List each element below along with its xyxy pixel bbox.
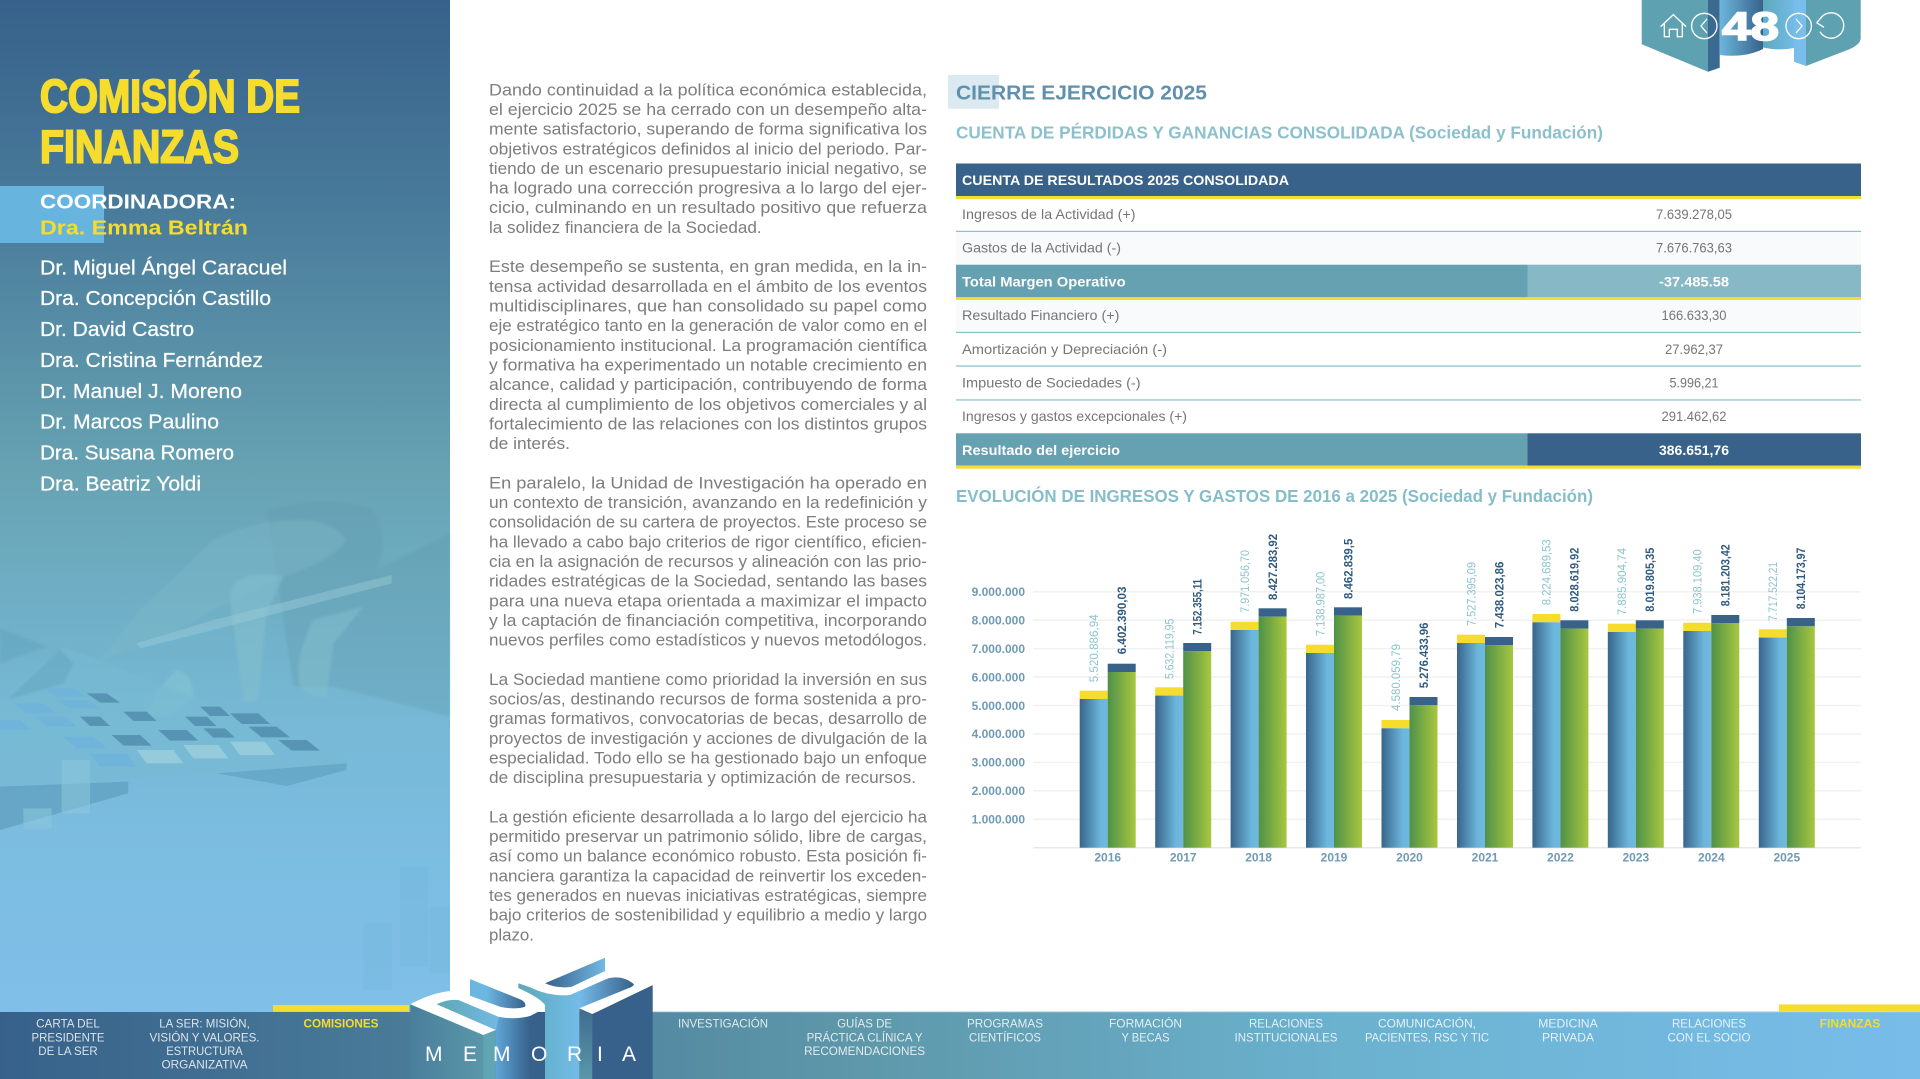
- bars 2024: 8.181.203,42: [1719, 544, 1733, 606]
- title: COMISIÓN DE: [40, 70, 300, 122]
- row: resultado del ejercicio: 386.651,76: [1659, 442, 1729, 458]
- row: impuesto: Impuesto de Sociedades (-): [962, 374, 1141, 390]
- paragraph 5: bajo criterios de sostenibilidad y equilibrio a medio y largo: [489, 906, 927, 925]
- paragraph 2: tensa actividad desarrollada en el ámbito de los eventos: [489, 277, 927, 296]
- nav: formacion: Y BECAS: [1122, 1032, 1170, 1044]
- member list: Dra. Cristina Fernández: [40, 350, 263, 372]
- bars 2020: 5.276.433,96: [1417, 622, 1431, 688]
- paragraph 4: [489, 670, 928, 787]
- paragraph 3: y la captación de financiación competitiva, incorporando: [489, 611, 927, 630]
- paragraph 4: socios/as, destinando recursos de forma sostenida a pro-: [489, 690, 927, 708]
- y axis labels: [972, 585, 1025, 827]
- bars 2016: 6.402.390,03: [1115, 586, 1129, 654]
- bars 2023: [1608, 547, 1664, 865]
- icon: previous: [1692, 13, 1717, 39]
- active tab marker: finanzas: [1779, 1004, 1920, 1012]
- table header: [956, 164, 1861, 199]
- bar chart: [972, 534, 1861, 865]
- icon: home: [1661, 15, 1686, 37]
- paragraph 5: La gestión eficiente desarrollada a lo largo del ejercicio ha: [489, 807, 928, 826]
- row: excepcionales: [962, 408, 1727, 424]
- bars 2017: 2017: [1170, 851, 1197, 865]
- member list: [40, 256, 287, 496]
- bars 2023: 2023: [1622, 851, 1649, 865]
- bars 2021: 2021: [1472, 851, 1499, 865]
- icon: next: [1786, 13, 1811, 39]
- top navigation badge: [1642, 0, 1861, 72]
- bars 2019: [1306, 538, 1362, 865]
- row: resultado financiero: 166.633,30: [1662, 307, 1727, 323]
- paragraph 3: nuevos perfiles como estadísticos y nuevos metodólogos.: [489, 631, 927, 650]
- bars 2025: 8.104.173,97: [1794, 547, 1808, 609]
- row: excepcionales: Ingresos y gastos excepcionales (+): [962, 408, 1187, 424]
- member list: Dra. Susana Romero: [40, 443, 234, 465]
- paragraph 4: especialidad. Todo ello se ha gestionado bajo un enfoque: [489, 748, 927, 768]
- paragraph 5: [489, 807, 928, 944]
- row: amortizacion: Amortización y Depreciación (-): [962, 341, 1167, 357]
- row: resultado financiero: [956, 300, 1861, 333]
- bars 2018: 8.427.283,92: [1266, 534, 1280, 600]
- paragraph 2: alcance, calidad y participación, contribuyendo de forma: [489, 375, 928, 394]
- nav: medicina privada: MEDICINA: [1538, 1019, 1598, 1031]
- coordinator: Dra. Emma Beltrán: [40, 218, 248, 240]
- member list: Dr. Miguel Ángel Caracuel: [40, 256, 287, 280]
- paragraph 1: el ejercicio 2025 se ha cerrado con un desempeño alta-: [489, 100, 927, 119]
- paragraph 5: tes generados en nuevas iniciativas estratégicas, siempre: [489, 886, 927, 905]
- active tab marker: comisiones: [273, 1005, 409, 1012]
- nav: relaciones institucionales: RELACIONES: [1249, 1019, 1323, 1031]
- bars 2021: 7.527.395,09: [1464, 562, 1478, 626]
- y axis labels: 2.000.000: [972, 784, 1025, 798]
- paragraph 5: nanciera garantiza la capacidad de reinvertir los exceden-: [489, 866, 927, 885]
- nav: comunicacion: PACIENTES, RSC Y TIC: [1365, 1032, 1489, 1044]
- paragraph 3: En paralelo, la Unidad de Investigación ha operado en: [489, 473, 927, 492]
- body text column: [489, 80, 928, 944]
- paragraph 2: fortalecimiento de las relaciones con los distintos grupos: [489, 414, 927, 433]
- paragraph 2: y formativa ha experimentado un notable crecimiento en: [489, 356, 927, 374]
- bars 2016: [1080, 586, 1136, 865]
- bars 2023: 8.019.805,35: [1643, 547, 1657, 612]
- row: total margen operativo: [956, 265, 1861, 300]
- bars 2016: 5.520.886,94: [1087, 614, 1101, 682]
- paragraph 1: la solidez financiera de la Sociedad.: [489, 218, 762, 237]
- bars 2019: 7.138.987,00: [1313, 571, 1327, 636]
- bars 2022: [1532, 539, 1588, 865]
- nav: programas: [967, 1019, 1043, 1044]
- bars 2025: 7.717.522,21: [1766, 562, 1780, 621]
- paragraph 3: [489, 473, 927, 650]
- nav: guias: GUÍAS DE: [837, 1018, 892, 1031]
- title: [40, 70, 300, 173]
- y axis labels: 4.000.000: [972, 727, 1025, 741]
- paragraph 1: [489, 80, 928, 237]
- bars 2017: 7.152.355,11: [1190, 579, 1204, 635]
- bars 2018: 2018: [1245, 851, 1272, 865]
- y axis labels: 9.000.000: [972, 585, 1025, 599]
- y axis labels: 7.000.000: [972, 642, 1025, 656]
- y axis labels: 8.000.000: [972, 613, 1025, 627]
- bars 2023: 7.885.904,74: [1615, 548, 1629, 615]
- nav: la ser: ORGANIZATIVA: [162, 1060, 248, 1072]
- page number: 48: [1722, 5, 1779, 49]
- bars 2024: 7.938.109,40: [1691, 549, 1705, 614]
- paragraph 2: Este desempeño se sustenta, en gran medida, en la in-: [489, 257, 927, 276]
- icon: back arrow: [1817, 13, 1844, 38]
- nav: carta del presidente: DE LA SER: [38, 1046, 98, 1058]
- bars 2016: 2016: [1094, 851, 1121, 865]
- paragraph 1: ha logrado una corrección progresiva a lo largo del ejer-: [489, 179, 927, 198]
- section heading: CIERRE EJERCICIO 2025: [956, 82, 1207, 104]
- paragraph 4: proyectos de investigación y acciones de divulgación de la: [489, 729, 928, 748]
- y axis labels: 1.000.000: [972, 813, 1025, 827]
- nav: guias: PRÁCTICA CLÍNICA Y: [807, 1031, 923, 1044]
- bars 2022: 2022: [1547, 851, 1574, 865]
- y axis labels: 3.000.000: [972, 756, 1025, 770]
- paragraph 3: ha llevado a cabo bajo criterios de rigor científico, eficien-: [489, 532, 927, 551]
- logo: memoria: [410, 958, 653, 1079]
- paragraph 4: gramas formativos, convocatorias de becas, desarrollo de: [489, 709, 927, 728]
- paragraph 3: ridades estratégicas de la Sociedad, sentando las bases: [489, 572, 927, 591]
- paragraph 1: Dando continuidad a la política económica establecida,: [489, 80, 927, 99]
- nav: formacion: FORMACIÓN: [1109, 1018, 1182, 1031]
- photo: hand and calculator: [0, 502, 450, 990]
- nav: la ser: ESTRUCTURA: [166, 1046, 243, 1058]
- paragraph 1: cicio, culminando en un resultado positivo que refuerza: [489, 198, 928, 217]
- bars 2025: [1759, 547, 1815, 865]
- paragraph 1: mente satisfactorio, superando de forma significativa los: [489, 120, 927, 139]
- nav: medicina privada: [1538, 1019, 1598, 1044]
- row: ingresos: 7.639.278,05: [1656, 206, 1732, 222]
- logo wordmark: MEMORIA: [425, 1043, 636, 1066]
- row: ingresos: [956, 206, 1861, 232]
- paragraph 5: permitido preservar un patrimonio sólido, libre de cargas,: [489, 827, 927, 846]
- paragraph 3: para una nueva etapa orientada a maximizar el impacto: [489, 591, 927, 610]
- member list: Dr. Marcos Paulino: [40, 412, 219, 434]
- nav: relaciones institucionales: INSTITUCIONALES: [1234, 1032, 1338, 1044]
- paragraph 2: posicionamiento institucional. La programación científica: [489, 336, 928, 355]
- row: total margen operativo: -37.485.58: [1659, 273, 1729, 289]
- nav: programas: PROGRAMAS: [967, 1019, 1043, 1031]
- row: amortizacion: 27.962,37: [1665, 341, 1723, 357]
- row: total margen operativo: Total Margen Operativo: [962, 273, 1126, 289]
- nav: programas: CIENTÍFICOS: [969, 1031, 1041, 1044]
- y axis labels: 6.000.000: [972, 670, 1025, 684]
- row: impuesto: [956, 374, 1861, 401]
- bars 2019: 8.462.839,5: [1341, 538, 1355, 599]
- chart heading: EVOLUCIÓN DE INGRESOS Y GASTOS DE 2016 a 2025 (Sociedad y Fundación): [956, 485, 1593, 506]
- nav: la ser: VISIÓN Y VALORES.: [150, 1031, 260, 1044]
- row: resultado del ejercicio: [956, 433, 1861, 469]
- bars 2017: 5.632.119,95: [1162, 618, 1176, 679]
- bars 2022: 8.028.619,92: [1568, 547, 1582, 612]
- row: gastos: Gastos de la Actividad (-): [962, 240, 1121, 256]
- nav: comisiones: COMISIONES: [304, 1019, 379, 1031]
- nav: carta del presidente: PRESIDENTE: [32, 1032, 105, 1044]
- nav: carta del presidente: [32, 1019, 105, 1058]
- nav: guias: [804, 1018, 925, 1058]
- bars 2022: 8.224.689,53: [1540, 539, 1554, 605]
- nav: investigacion: INVESTIGACIÓN: [678, 1018, 768, 1031]
- table header: CUENTA DE RESULTADOS 2025 CONSOLIDADA: [962, 172, 1289, 188]
- paragraph 2: multidisciplinares, que han consolidado su papel como: [489, 296, 927, 316]
- nav: la ser: LA SER: MISIÓN,: [159, 1018, 250, 1031]
- paragraph 2: eje estratégico tanto en la generación de valor como en el: [489, 316, 927, 335]
- member list: Dr. Manuel J. Moreno: [40, 381, 242, 403]
- bars 2020: 2020: [1396, 851, 1423, 865]
- paragraph 3: un contexto de transición, avanzando en la redefinición y: [489, 493, 927, 512]
- paragraph 3: cia en la asignación de recursos y alineación con las prio-: [489, 552, 927, 571]
- nav: finanzas: FINANZAS: [1820, 1019, 1881, 1031]
- row: resultado del ejercicio: Resultado del ejercicio: [962, 442, 1120, 458]
- paragraph 5: así como un balance económico robusto. Esta posición fi-: [489, 847, 927, 866]
- member list: Dr. David Castro: [40, 319, 194, 341]
- footer navigation: [0, 1004, 1920, 1079]
- nav: medicina privada: PRIVADA: [1542, 1032, 1594, 1044]
- paragraph 3: consolidación de su cartera de proyectos. Este proceso se: [489, 513, 927, 532]
- bars 2017: [1155, 579, 1211, 865]
- paragraph 4: de disciplina presupuestaria y optimización de recursos.: [489, 768, 916, 787]
- coordinator: [40, 192, 248, 240]
- member list: Dra. Concepción Castillo: [40, 288, 271, 310]
- row: ingresos: Ingresos de la Actividad (+): [962, 206, 1136, 222]
- bars 2018: [1231, 534, 1287, 865]
- paragraph 2: de interés.: [489, 434, 570, 453]
- row: impuesto: 5.996,21: [1670, 374, 1719, 390]
- nav: comunicacion: COMUNICACIÓN,: [1378, 1018, 1476, 1031]
- row: gastos: [956, 232, 1861, 265]
- member list: Dra. Beatriz Yoldi: [40, 474, 201, 496]
- nav: carta del presidente: CARTA DEL: [36, 1019, 100, 1031]
- bars 2020: 4.580.059,79: [1389, 644, 1403, 711]
- results table: [956, 164, 1861, 469]
- paragraph 5: plazo.: [489, 925, 534, 944]
- paragraph 1: tiendo de un escenario presupuestario inicial negativo, se: [489, 159, 927, 178]
- row: resultado financiero: Resultado Financiero (+): [962, 307, 1119, 323]
- paragraph 2: [489, 257, 928, 453]
- y axis labels: 5.000.000: [972, 699, 1025, 713]
- row: gastos: 7.676.763,63: [1656, 240, 1732, 256]
- nav: relaciones institucionales: [1234, 1019, 1338, 1044]
- nav: guias: RECOMENDACIONES: [804, 1046, 925, 1058]
- table heading: CUENTA DE PÉRDIDAS Y GANANCIAS CONSOLIDADA (Sociedad y Fundación): [956, 122, 1603, 143]
- paragraph 1: objetivos estratégicos definidos al inicio del periodo. Par-: [489, 139, 927, 158]
- bars 2019: 2019: [1321, 851, 1348, 865]
- bars 2020: [1382, 622, 1438, 865]
- bars 2024: [1683, 544, 1739, 865]
- bars 2024: 2024: [1698, 851, 1725, 865]
- nav: comunicacion: [1365, 1018, 1489, 1044]
- title: FINANZAS: [40, 121, 239, 173]
- row: excepcionales: 291.462,62: [1662, 408, 1727, 424]
- bars 2021: [1457, 561, 1513, 865]
- paragraph 2: directa al cumplimiento de los objetivos comerciales y al: [489, 395, 927, 414]
- bars 2025: 2025: [1773, 851, 1800, 865]
- coordinator: COORDINADORA:: [40, 192, 236, 214]
- bars 2021: 7.438.023,86: [1492, 561, 1506, 628]
- paragraph 4: La Sociedad mantiene como prioridad la inversión en sus: [489, 670, 927, 689]
- nav: relaciones con el socio: CON EL SOCIO: [1668, 1032, 1751, 1044]
- nav: relaciones con el socio: [1668, 1019, 1751, 1044]
- row: amortizacion: [956, 341, 1861, 367]
- section heading: [948, 75, 1207, 109]
- accent square: [0, 186, 104, 243]
- nav: formacion: [1109, 1018, 1182, 1044]
- nav: la ser: [150, 1018, 260, 1072]
- nav: relaciones con el socio: RELACIONES: [1672, 1019, 1746, 1031]
- bars 2018: 7.971.056,70: [1238, 550, 1252, 613]
- panel: sidebar: [0, 0, 450, 1012]
